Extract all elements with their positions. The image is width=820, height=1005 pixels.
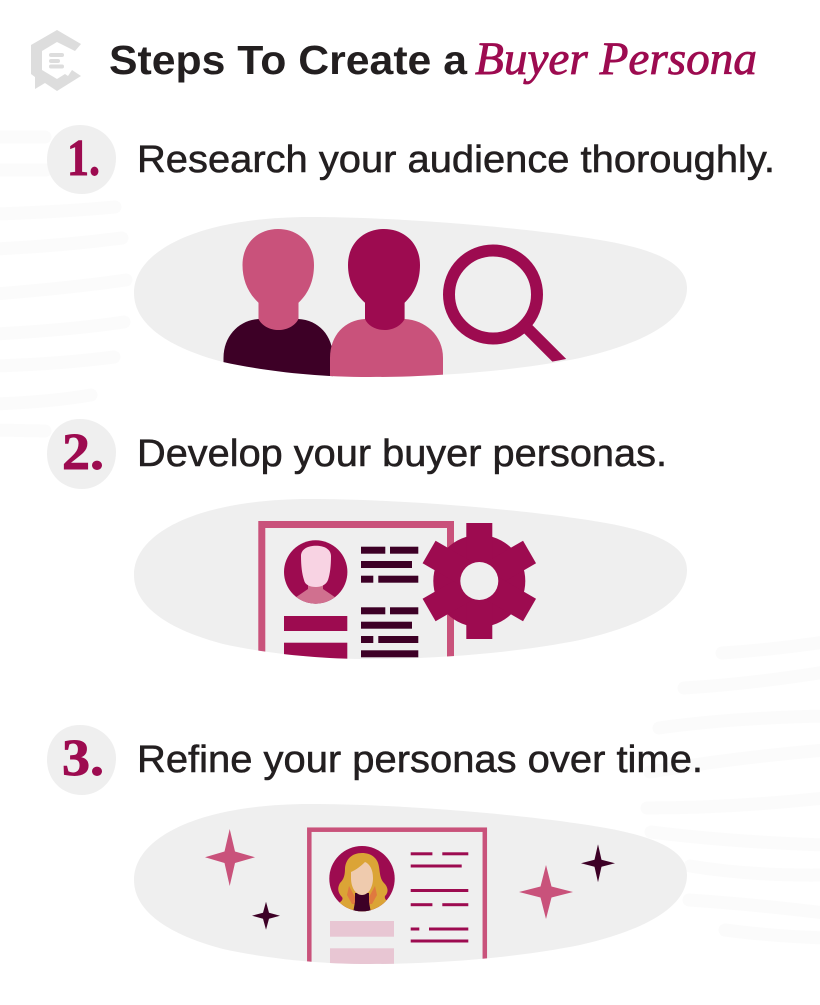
title: [109, 33, 757, 85]
icon: gear: [423, 523, 536, 639]
icon: magnifying glass: [449, 250, 575, 376]
logo: [31, 30, 81, 91]
icon: left person: [224, 229, 333, 385]
profile text lines: [361, 547, 418, 657]
step 1 number badge: 1.: [67, 130, 100, 187]
panel: refined persona illustration: [134, 804, 687, 964]
profile bars: [330, 921, 394, 968]
panel: persona profile and gear illustration: [134, 499, 687, 659]
step 2 heading: Develop your buyer personas.: [137, 433, 667, 475]
panel: research illustration: [134, 217, 687, 385]
refined profile card frame: [307, 827, 488, 962]
step 1 number badge: [47, 125, 116, 194]
profile card frame: [258, 521, 454, 656]
step 1 heading: Research your audience thoroughly.: [137, 139, 775, 181]
step 2 number badge: 2.: [62, 424, 104, 481]
step 3 number badge: [47, 725, 116, 795]
profile bars: [284, 616, 347, 663]
step 3 heading: Refine your personas over time.: [137, 739, 703, 781]
icon: sparkle large left: [205, 829, 255, 886]
avatar: woman with blonde hair: [329, 846, 395, 915]
profile text lines: [411, 852, 468, 942]
icon: sparkle small right: [581, 844, 615, 882]
title: Buyer Persona: [475, 33, 757, 85]
step 2 number badge: [47, 419, 116, 489]
avatar: [284, 540, 347, 604]
title: Steps To Create a: [109, 37, 468, 83]
icon: right person: [330, 229, 443, 385]
step 3 number badge: 3.: [62, 730, 104, 787]
icon: sparkle small left: [252, 902, 280, 930]
icon: sparkle large right: [519, 865, 573, 919]
